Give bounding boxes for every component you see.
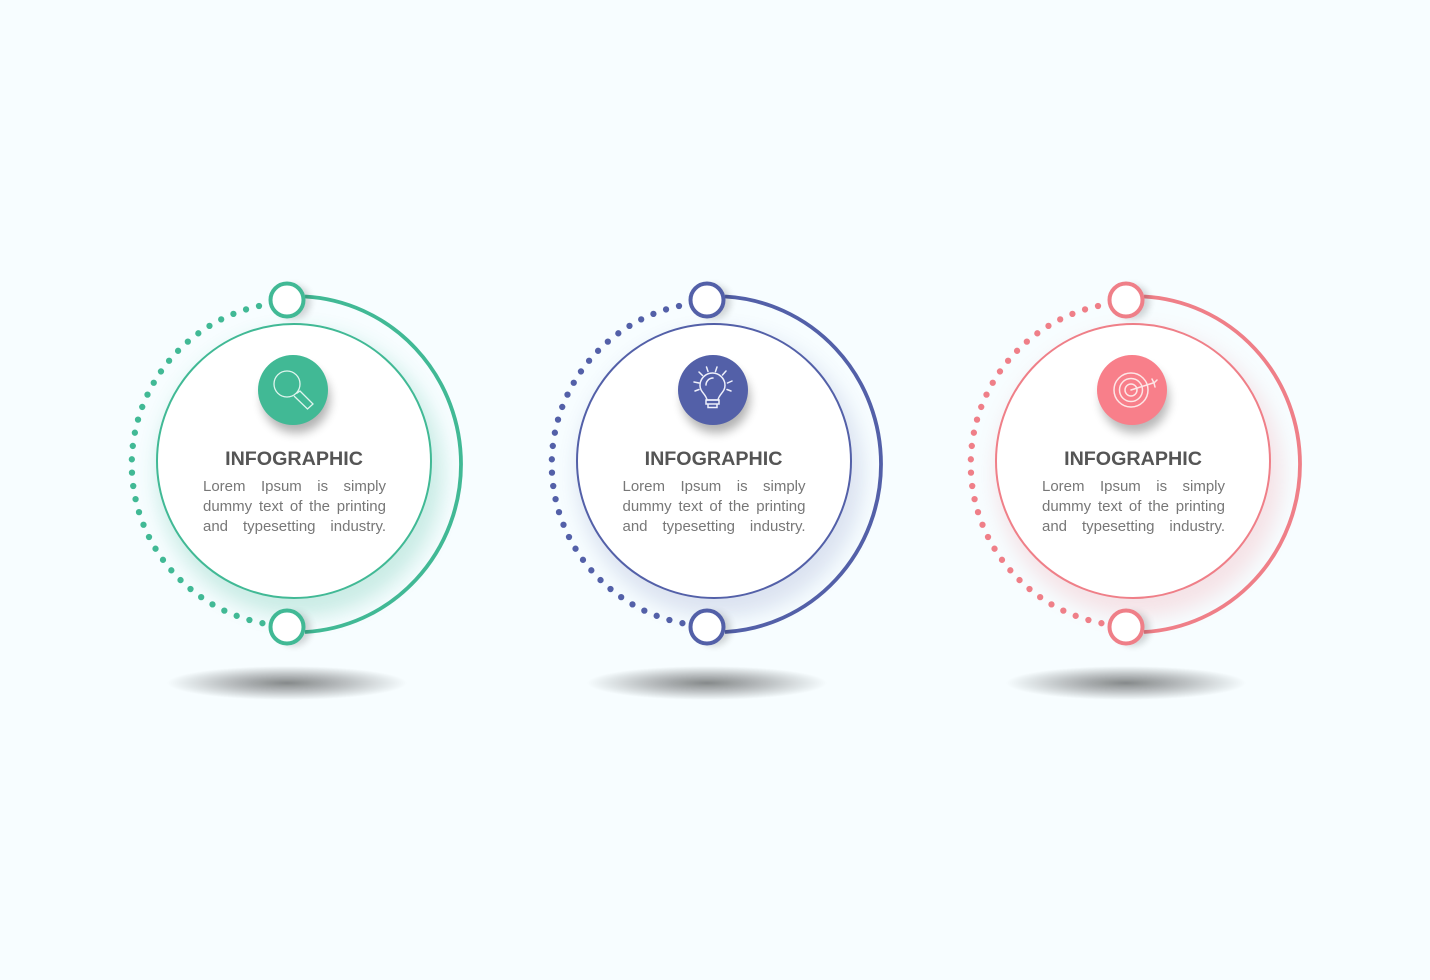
top node (1110, 284, 1150, 319)
solid arc (305, 296, 461, 632)
text block (1042, 478, 1225, 535)
dotted arc (132, 306, 267, 624)
panel: blue infographic (548, 282, 883, 699)
heading: INFOGRAPHIC (225, 448, 363, 470)
bottom node (270, 610, 311, 646)
ground shadow (586, 666, 826, 700)
ground shadow (167, 666, 407, 700)
text block: and typesetting industry. (203, 518, 386, 535)
icon: light bulb (678, 355, 750, 433)
top node (270, 284, 311, 319)
solid arc (1144, 296, 1300, 632)
text block (622, 478, 806, 535)
top node (690, 284, 730, 319)
text block: dummy text of the printing (1042, 498, 1225, 515)
panel: green infographic (128, 282, 463, 699)
inner circle (157, 324, 431, 598)
text block: dummy text of the printing (622, 498, 806, 515)
inner circle (996, 324, 1270, 598)
text block: dummy text of the printing (203, 498, 386, 515)
crescent shadow (157, 331, 443, 617)
icon: magnifier (258, 355, 330, 433)
icon: target (1097, 355, 1169, 433)
dotted arc (971, 306, 1106, 624)
bottom node (1110, 610, 1150, 646)
crescent shadow (996, 331, 1282, 617)
ground shadow (1006, 666, 1246, 700)
text block (203, 478, 386, 535)
solid arc (724, 296, 881, 632)
heading: INFOGRAPHIC (645, 448, 782, 470)
heading: INFOGRAPHIC (1064, 448, 1202, 470)
text block: Lorem Ipsum is simply (203, 478, 386, 495)
crescent shadow (576, 331, 862, 617)
bottom node (690, 610, 730, 646)
panel: red infographic (968, 282, 1302, 699)
text block: Lorem Ipsum is simply (1042, 478, 1225, 495)
dotted arc (551, 306, 686, 624)
text block: and typesetting industry. (622, 518, 806, 535)
text block: Lorem Ipsum is simply (622, 478, 806, 495)
inner circle (576, 324, 850, 598)
text block: and typesetting industry. (1042, 518, 1225, 535)
